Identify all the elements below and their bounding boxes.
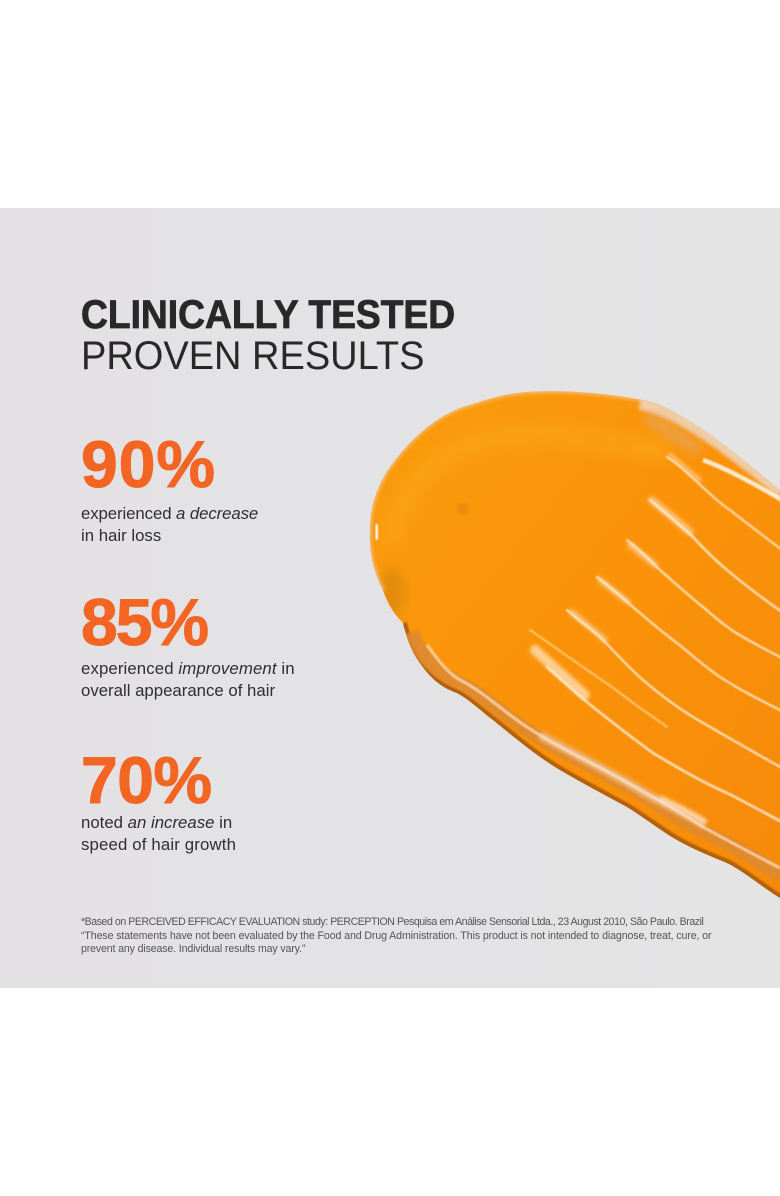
dark lower rim [403,623,780,898]
stat: 70%: 70% [81,743,212,817]
serum swatch [370,391,780,898]
footnote [81,916,712,955]
footnote: “These statements have not been evaluated by the Food and Drug Administration. This product is not intended to diagnose, treat, cure, or [81,930,711,942]
footnote: prevent any disease. Individual results may vary.” [81,943,305,955]
stat: 70%: speed of hair growth [81,835,236,854]
footnote: *Based on PERCEIVED EFFICACY EVALUATION study: PERCEPTION Pesquisa em Análise Sensorial Ltda., 23 August 2010, São Paulo. Brazil [81,916,703,928]
translucent upper-right rim [640,403,780,492]
stat: 85%: 85% [81,585,207,659]
stat: 85%: experienced improvement in [81,659,295,678]
stat: 90%: 90% [81,427,216,501]
pale lower rim highlights [427,645,780,868]
stat: 90%: experienced a decrease [81,504,258,523]
title [81,293,455,378]
stat: 70% [81,743,236,854]
brush streaks [530,457,780,822]
title: CLINICALLY TESTED [81,293,455,337]
soft streak starts [535,455,700,695]
shaded lower-left pool [380,568,404,616]
pale outline [370,392,527,590]
stat: 90% [81,427,258,545]
bubble [457,503,469,515]
stat: 70%: noted an increase in [81,813,232,832]
top-right clear streak [703,460,780,500]
stat: 85% [81,585,295,700]
gloss [376,524,378,540]
stat: 85%: overall appearance of hair [81,681,275,700]
title: PROVEN RESULTS [81,334,424,378]
stat: 90%: in hair loss [81,526,161,545]
inner ring [497,430,666,459]
background panel [0,208,780,988]
